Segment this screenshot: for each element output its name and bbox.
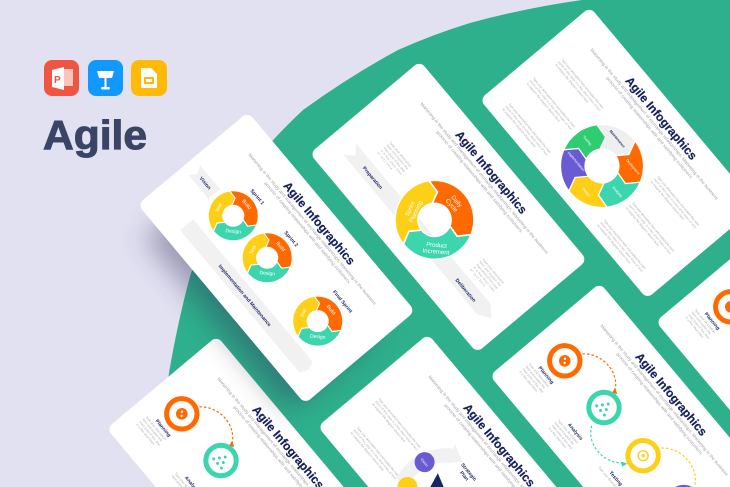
text block: left top: Type your description here and explain the main xyxy=(560,58,605,110)
step: Planning: Type your description xyxy=(528,362,550,388)
step: Planning: Type your description xyxy=(145,415,167,441)
arrow: Testing onward xyxy=(662,440,704,487)
arrow: Planning to Analysis xyxy=(580,346,626,396)
heading: Agile Infographics xyxy=(452,128,530,217)
text block: Type your description here and explain the main xyxy=(378,397,422,449)
panel: right slide, Planning steps xyxy=(490,283,730,487)
node: Vision: Vision xyxy=(420,457,429,468)
panel: far right slide, Planning xyxy=(656,229,730,487)
description: Marketing is the study and management of exchange relationships. Marketing is the business xyxy=(419,101,550,255)
label: Deliberation: Deliberation xyxy=(454,278,477,304)
step: Testing: Testing xyxy=(608,470,623,487)
icon: Keynote xyxy=(88,60,123,96)
cycle chart: three segments: Daily xyxy=(449,195,463,209)
heading: Agile Infographics xyxy=(622,74,700,163)
cycle chart: six segments: Maintenance xyxy=(609,129,626,149)
panel: centre slide, three step cycle xyxy=(310,61,587,353)
text block: left middle: point of this step in a few short lines of text xyxy=(529,79,573,131)
step: Analysis: here and explain the xyxy=(554,421,575,446)
text block: right bottom: point of this step in a few short lines of text xyxy=(599,221,644,273)
cycle chart: Sprint 1 xyxy=(195,174,281,260)
step: Planning: in a few short lines xyxy=(518,370,539,393)
band: Implementation and Maintenance xyxy=(180,219,315,375)
heading: Agile Infographics xyxy=(280,179,358,268)
text block: right middle: Type your description here and explain the main xyxy=(631,201,675,253)
label: Strategic Plan: Plan xyxy=(458,470,470,482)
panel: bottom left slide, Planning steps xyxy=(107,336,384,487)
cycle chart: Sprint 1: Design xyxy=(225,228,241,235)
step: Planning: main point of this step xyxy=(687,313,711,340)
green circle backdrop xyxy=(165,0,730,487)
description: process of creating relationships with and satisfying customers. xyxy=(605,76,694,180)
text block: point of this step in a few short lines of text xyxy=(353,428,397,480)
text block: right middle: point of this step in a few short lines of text xyxy=(628,204,672,255)
cycle chart: six segments: Analysis xyxy=(611,185,623,198)
text block: left xyxy=(376,141,413,179)
step: Planning: Planning xyxy=(154,418,172,439)
step: Analysis xyxy=(547,382,625,456)
text block: left middle: to support the diagram shown here xyxy=(526,82,561,123)
cycle chart: three segments xyxy=(374,154,511,289)
text block: left: of text here xyxy=(376,151,394,171)
cycle chart: three segments: Product xyxy=(426,242,447,250)
cycle chart: six segments xyxy=(527,91,677,241)
text block: Type your description here and explain the main xyxy=(356,426,400,478)
label: Sprint 2: Sprint 2 xyxy=(283,230,299,248)
text block: to support the diagram shown here xyxy=(371,402,407,443)
cycle chart: Sprint 2 xyxy=(229,216,315,302)
cycle chart: six segments: Deployment xyxy=(625,158,640,176)
cycle chart: three segments: Increment xyxy=(422,248,450,257)
text block: to support the diagram shown here xyxy=(350,431,385,472)
step: Analysis xyxy=(171,435,242,487)
text block: right bottom: to support the diagram shown here xyxy=(596,224,632,265)
text block: left bottom: to support the diagram shown here xyxy=(501,107,537,148)
text block: right bottom: Type your description here and explain the main xyxy=(603,218,647,270)
description: Marketing is the study and management of exchange relationships. Marketing is the business xyxy=(599,323,730,477)
cycle chart: three segments: Planning xyxy=(409,200,424,224)
node: Vision xyxy=(411,448,439,476)
text block: right: Type your description xyxy=(481,258,505,285)
description: process of creating relationships with and satisfying customers. xyxy=(435,130,524,234)
label: Strategic Plan xyxy=(455,462,478,487)
cycle chart: six segments: Design xyxy=(581,187,591,198)
curved arrow band xyxy=(400,437,467,487)
cycle chart: Sprint 2: Design xyxy=(259,270,275,277)
text block: point of this step in a few short lines of text xyxy=(374,400,419,452)
step: purple xyxy=(662,481,705,487)
step: Planning: here and explain the xyxy=(690,311,712,336)
step: Analysis: in a few short lines xyxy=(547,426,568,449)
band: Vision: Vision xyxy=(198,176,212,191)
icon: Google Slides xyxy=(131,60,167,96)
text block: right top: point of this step in a few short lines of text xyxy=(653,177,697,229)
text block: left bottom: point of this step in a few short lines of text xyxy=(505,105,549,157)
band: Implementation and Maintenance: Implementation and Maintenance xyxy=(217,264,272,328)
cycle chart: six segments: Testing xyxy=(582,135,592,146)
step: Planning: Type your description xyxy=(694,308,716,334)
cycle chart: three segments: Sprint xyxy=(405,201,417,218)
step: Planning: in a few short lines xyxy=(135,423,156,446)
step: Planning: Planning xyxy=(703,311,721,332)
step: Planning: main point of this step xyxy=(138,420,162,447)
text block: left: main point of this step xyxy=(383,146,406,173)
text block: right middle: to support the diagram shown here xyxy=(625,206,660,247)
text block: left middle: Type your description here and explain the main xyxy=(532,77,576,128)
text block: right: main point of this step xyxy=(475,263,499,290)
cycle chart: three segments: Cycle xyxy=(444,198,459,214)
step: Planning: here and explain the xyxy=(141,418,163,443)
navy triangle xyxy=(424,473,451,487)
text block: left bottom: Type your description here and explain the main xyxy=(508,102,552,154)
step: Planning: here and explain the xyxy=(524,365,546,390)
text block: left top: to support the diagram shown here xyxy=(554,63,590,104)
label: Final Sprint: Final Sprint xyxy=(331,289,353,315)
cycle chart: Sprint 2: Build xyxy=(274,241,286,253)
arrow band xyxy=(343,143,498,324)
text block: left top: point of this step in a few short lines of text xyxy=(557,60,602,112)
step: Testing xyxy=(597,431,665,487)
arrow: Analysis to Testing xyxy=(583,424,628,473)
step: Analysis: Analysis xyxy=(566,422,584,442)
cycle chart: Sprint 1: Build xyxy=(240,199,252,211)
step: Planning: in a few short lines xyxy=(684,316,705,339)
text block: right: here and explain the xyxy=(478,260,502,287)
heading: Agile Infographics xyxy=(632,350,710,439)
cycle chart: Sprint 1: Test xyxy=(214,202,224,214)
band: Vision xyxy=(189,165,220,199)
step: Planning xyxy=(135,388,203,453)
arrow: Planning to Analysis xyxy=(197,399,243,449)
cycle chart: Final Sprint: Test xyxy=(299,308,309,319)
cycle chart: Final Sprint: Design xyxy=(310,333,326,341)
panel: left slide, three sprints xyxy=(138,112,415,404)
panel: bottom centre slide, Strategic plan xyxy=(318,334,595,487)
cycle chart: Final Sprint xyxy=(280,279,366,365)
step: Planning xyxy=(684,281,730,346)
text block: right top: to support the diagram shown here xyxy=(650,180,685,221)
text block: left: Type your description xyxy=(389,141,412,168)
text block: left: in a few short lines xyxy=(379,149,403,176)
label: Strategic Plan: Strategic xyxy=(459,462,478,483)
text block: left: here and explain the xyxy=(386,143,409,171)
description: Marketing is the study and management of exchange relationships. Marketing is the business xyxy=(589,47,720,201)
icon: PowerPoint xyxy=(44,60,79,96)
step: Analysis: main point of this step xyxy=(551,424,574,450)
text block: right: in a few short lines xyxy=(472,265,496,293)
step: Analysis: Type your description xyxy=(557,419,579,445)
text block: right top: Type your description here and explain the main xyxy=(656,175,700,227)
cycle chart: Final Sprint: Build xyxy=(325,304,337,317)
description: process of creating relationships with and satisfying customers. xyxy=(263,181,352,285)
description: process of creating relationships with and satisfying customers. xyxy=(615,352,704,456)
node: yellow xyxy=(393,473,422,487)
description: Marketing is the study and management of exchange relationships. Marketing is the business xyxy=(247,152,378,306)
step: Planning: main point of this step xyxy=(521,367,545,394)
cycle chart: Sprint 2: Test xyxy=(248,244,258,256)
panel: top right slide, six step cycle xyxy=(478,7,730,300)
text block: right: of text here xyxy=(469,268,486,287)
title: Agile: Agile xyxy=(43,112,147,158)
text block: right xyxy=(469,258,505,295)
step: Planning xyxy=(518,335,586,400)
step: Planning: Planning xyxy=(537,365,555,386)
label: Preparation: Preparation xyxy=(361,166,383,191)
slide shadow xyxy=(145,164,377,410)
label: Sprint 1: Sprint 1 xyxy=(249,188,265,206)
cycle chart: six segments: Implementation xyxy=(567,151,586,172)
icon: PowerPoint: P xyxy=(54,75,61,86)
